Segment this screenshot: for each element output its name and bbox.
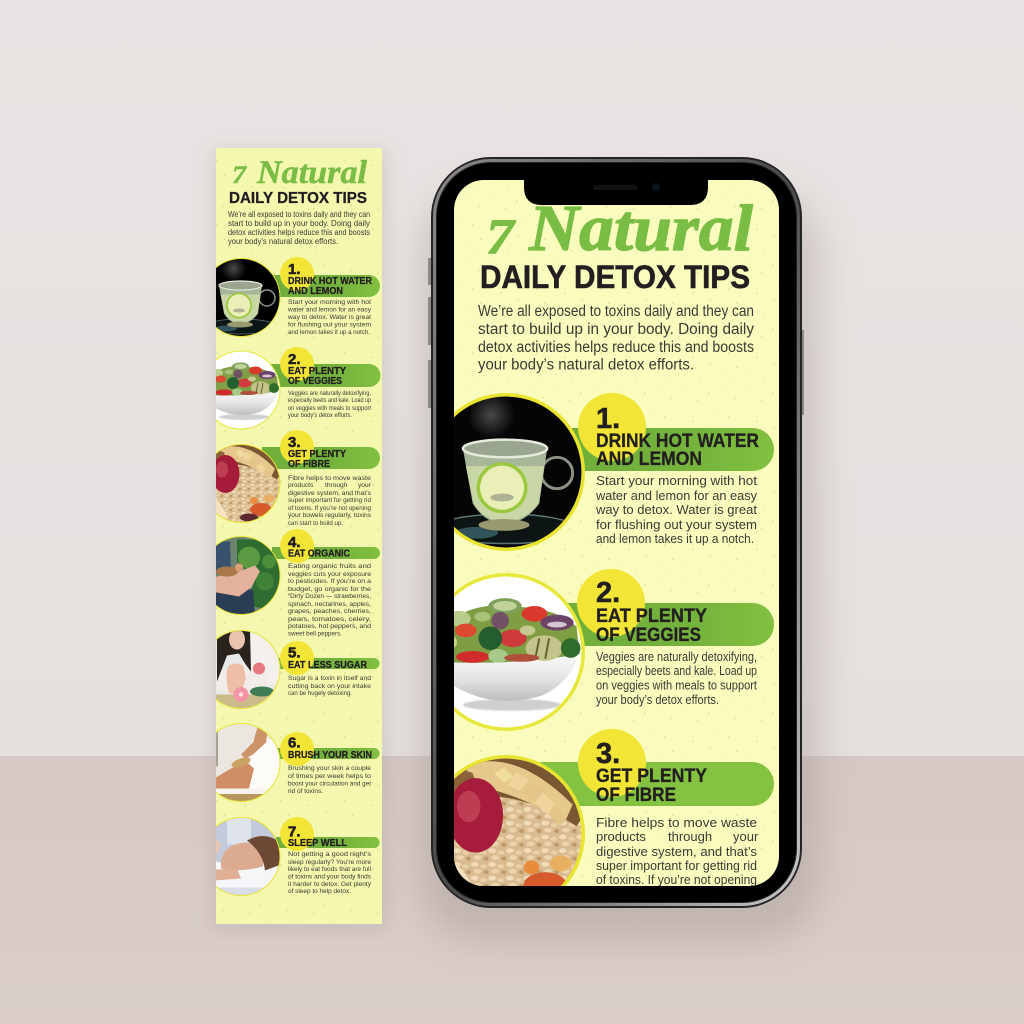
phone tip 1: Start your morning with hot [596,473,757,488]
phone tip 3: your [733,829,759,844]
strip tip 4: EAT ORGANIC [288,548,350,560]
strip tip 2: your body’s detox efforts. [288,412,352,419]
strip tip 3: through [325,482,348,489]
phone tip 3: 3. [596,738,620,770]
strip tip 7: likely to eat foods that are full [288,866,372,873]
phone tip 3: of toxins. If you’re not opening [596,872,757,887]
phone tip 3: digestive system, and that’s [596,844,758,859]
strip intro text: We’re all exposed to toxins daily and they can [228,210,370,219]
strip tip 2: on veggies with meals to support [288,405,371,412]
strip tip 7: of toxins and your body finds [288,874,372,880]
strip tip 4: grapes, peaches, cherries, [288,608,371,615]
strip tip 3: of toxins. If you’re not opening [288,505,371,512]
strip tip 6: of times per week helps to [288,773,371,780]
strip tip 6: BRUSH YOUR SKIN [288,750,372,761]
background floor [0,756,1024,1024]
phone intro text: We’re all exposed to toxins daily and they can [478,303,754,320]
strip tip 4: potatoes, hot peppers, and [288,623,371,630]
phone side buttons [428,258,804,415]
strip tip 2: EAT PLENTY [288,366,346,377]
strip tip 1 [201,256,380,338]
phone title: Natural [528,192,754,265]
phone subtitle: DAILY DETOX TIPS [480,259,750,295]
phone tip 3: OF FIBRE [596,784,676,806]
phone intro text [478,303,754,374]
phone tip 1 [427,392,774,551]
phone tip 1: way to detox. Water is great [595,502,757,517]
strip tip 1: and lemon takes it up a notch. [288,329,370,336]
phone title [488,204,754,254]
phone tip 2: OF VEGGIES [596,624,701,646]
strip tip 7: it harder to detox. Get plenty [288,881,372,888]
strip tip 3: 3. [288,434,301,451]
strip tip 2: Veggies are naturally detoxifying, [288,390,371,397]
strip title: Natural [256,155,368,191]
phone intro text: detox activities helps reduce this and boosts [478,339,754,356]
strip tip 7: SLEEP WELL [288,838,347,849]
strip tip 3: your bowels regularly, toxins [288,512,372,519]
strip tip 1: DRINK HOT WATER [288,276,373,287]
strip tip 4: veggies cuts your exposure [288,571,371,578]
phone screen [454,180,779,886]
strip tip 3: can start to build up. [288,520,343,527]
phone tip 3: products [596,829,646,844]
phone tip 1: DRINK HOT WATER [596,430,759,452]
strip intro text [228,210,370,246]
strip tip 1: way to detox. Water is great [287,314,371,321]
strip tip 2 [201,347,380,430]
strip tip 3: Fibre helps to move waste [288,475,371,482]
phone shadow [420,190,820,940]
phone notch [524,178,708,205]
phone tip 3: super important for getting rid [596,858,757,873]
phone tip 2: your body’s detox efforts. [596,692,719,707]
phone tip 1: water and lemon for an easy [595,488,757,503]
strip shadow [212,150,388,930]
phone tip 3: through [668,829,712,844]
strip tip 2: 2. [288,351,301,368]
phone tip 2: 2. [596,577,620,609]
strip tip 3: GET PLENTY [288,449,346,460]
phone tip 1: for flushing out your system [596,517,757,532]
strip tip 6: boost your circulation and get [288,780,371,788]
phone tip 2 [427,569,774,731]
phone tip 2: on veggies with meals to support [596,678,757,692]
strip tip 5: cutting back on your intake [288,683,371,690]
phone title: 7 [486,208,516,264]
strip tip 7: Not getting a good night’s [288,851,372,858]
strip tip 6: rid of toxins. [288,788,323,795]
strip tip 1: 1. [288,261,301,278]
strip tip 7: 7. [288,824,301,840]
strip tip 4: 4. [288,534,301,551]
strip tip 7: sleep regularly? You’re more [288,859,371,866]
phone intro text: start to build up in your body. Doing daily [478,321,754,338]
phone tip 2: especially beets and kale. Load up [596,663,757,678]
phone tip 1: 1. [596,403,620,435]
strip tip 4: sweet bell peppers. [288,630,342,638]
strip tip 3: OF FIBRE [288,459,330,470]
strip tip 4: “Dirty Dozen — strawberries, [288,593,371,600]
strip tip 4: to pesticides. If you’re on a [288,578,371,585]
phone tip 1: and lemon takes it up a notch. [596,531,754,546]
phone tip 2: Veggies are naturally detoxifying, [596,649,757,664]
strip intro text: start to build up in your body. Doing daily [228,219,370,228]
strip tip 2: OF VEGGIES [288,376,342,387]
strip tip 3: super important for getting rid [288,497,371,504]
strip tip 5: EAT LESS SUGAR [288,660,368,671]
strip tip 6: 6. [288,734,301,752]
strip tip 4: Eating organic fruits and [288,563,371,570]
phone tip 3: Fibre helps to move waste [596,815,757,830]
background wall [0,0,1024,756]
strip tip 3: products [288,482,314,489]
strip tip 4: spinach, nectarines, apples, [288,601,371,608]
strip tip 5: Sugar is a toxin in itself and [288,675,371,682]
strip tip 1: Start your morning with hot [288,299,371,306]
strip tip 1: AND LEMON [288,286,343,297]
strip tip 5: 5. [288,644,301,662]
strip tip 6: Brushing your skin a couple [288,765,371,772]
strip intro text: detox activities helps reduce this and boosts [228,228,370,237]
strip tip 1: for flushing out your system [288,322,372,329]
phone tip 2: EAT PLENTY [596,605,707,627]
strip tip 3: your [358,482,372,489]
phone tip 3 [454,729,774,886]
panel: full infographic strip [201,148,382,924]
strip tip 7: of sleep to help detox. [288,888,351,895]
strip tip 6 [216,723,380,802]
phone tip 3: GET PLENTY [596,765,707,787]
strip tip 5 [201,630,380,710]
strip tip 1: water and lemon for an easy [287,307,372,314]
strip intro text: your body’s natural detox efforts. [228,237,338,246]
phone mockup [427,157,804,913]
strip subtitle: DAILY DETOX TIPS [229,190,367,207]
strip tip 3: digestive system, and that’s [288,490,372,497]
strip tip 2: especially beets and kale. Load up [288,397,371,404]
strip tip 7 [216,817,380,896]
strip tip 4: budget, go organic for the [288,586,371,593]
strip tip 3 [201,430,380,527]
strip tip 5: can be hugely detoxing. [288,690,352,697]
phone body [431,157,802,908]
phone intro text: your body’s natural detox efforts. [478,356,694,374]
strip title: 7 [232,162,248,189]
strip tip 4 [201,529,380,638]
phone tip 1: AND LEMON [596,448,702,470]
strip tip 4: pears, tomatoes, celery, [288,616,371,623]
